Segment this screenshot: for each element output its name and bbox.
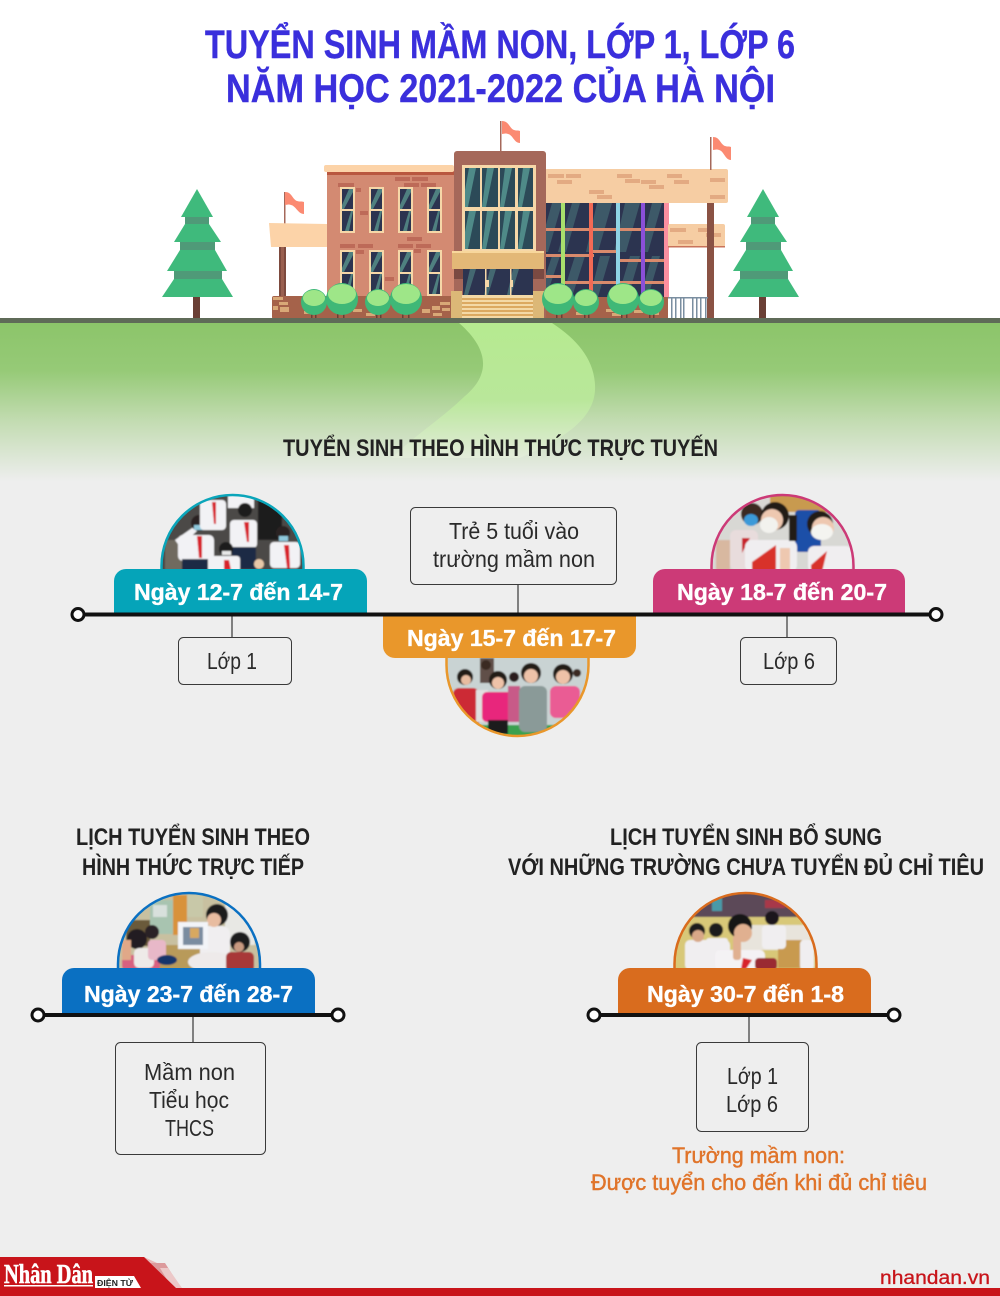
right wing [544,137,731,319]
box: school levels [116,1042,266,1154]
panel: supplementary timeline [588,891,927,1195]
timeline axis [588,1009,900,1021]
windows: upper row [340,187,442,233]
heading: online enrolment: TUYỂN SINH THEO HÌNH THỨC TRỰC TUYẾN [283,434,718,462]
ground line [0,318,1000,323]
note: preschools: Trường mầm non: [672,1143,845,1168]
panel: online timeline [72,494,942,739]
grass field with road [0,322,1000,482]
footer: red bar and logo [0,1257,1000,1296]
box: Lớp 1: Lớp 1 [207,648,257,674]
left wing slab, post and flag [269,192,327,297]
heading: supplementary enrolment: LỊCH TUYỂN SINH BỔ SUNG [610,823,882,851]
photo: young children [448,658,588,735]
box: school levels: Tiểu học [149,1087,229,1113]
timeline axis [32,1009,344,1021]
heading: supplementary enrolment [508,823,984,881]
box: preschool: trường mầm non [433,546,595,572]
title: NĂM HỌC 2021-2022 CỦA HÀ NỘI [226,66,775,111]
photo ring [674,893,816,969]
box: Lớp 6: Lớp 6 [763,648,815,674]
heading: in-person enrolment [76,823,310,881]
date label: 18-7 to 20-7: Ngày 18-7 đến 20-7 [677,579,887,605]
box: school levels: THCS [165,1115,214,1141]
box: grades: Lớp 1 [727,1063,778,1089]
windows: lower row [340,250,442,296]
panel: in-person timeline [32,891,344,1154]
photo ring [446,657,588,736]
date label: 30-7 to 1-8: Ngày 30-7 đến 1-8 [647,981,844,1007]
connector lines [232,584,787,638]
timeline axis [72,608,942,620]
central tower [451,121,546,319]
title [205,22,795,111]
footer: red bar and logo: ĐIỆN TỬ [97,1279,133,1288]
box: school levels: Mầm non [144,1059,235,1085]
photo: classroom [676,894,816,968]
date label: 12-7 to 14-7: Ngày 12-7 đến 14-7 [134,579,343,605]
sky [0,0,1000,320]
box: grades [696,1042,808,1132]
photo ring [712,495,854,570]
box: Lớp 6 [740,638,836,684]
date label: 23-7 to 28-7 [62,968,315,1013]
title: TUYỂN SINH MẦM NON, LỚP 1, LỚP 6 [205,22,795,67]
date label: 15-7 to 17-7 [383,616,636,658]
illustration: school building [162,121,799,319]
box: preschool: Trẻ 5 tuổi vào [449,518,579,544]
date label: 30-7 to 1-8 [618,968,871,1013]
heading: in-person enrolment: HÌNH THỨC TRỰC TIẾP [82,853,304,881]
left brick building [272,165,454,319]
note: preschools [591,1143,927,1195]
bushes [301,283,664,319]
connector line [192,1017,194,1042]
box: Lớp 1 [178,638,292,684]
box: grades: Lớp 6 [726,1091,778,1117]
photo: teacher with children [119,894,259,968]
date label: 15-7 to 17-7: Ngày 15-7 đến 17-7 [407,625,616,651]
icon: right tree [728,189,799,319]
heading: in-person enrolment: LỊCH TUYỂN SINH THEO [76,823,310,851]
date label: 23-7 to 28-7: Ngày 23-7 đến 28-7 [84,981,293,1007]
photo ring [118,893,260,969]
box: preschool [410,508,616,584]
photo: students saluting [162,496,302,569]
connector line [748,1017,750,1042]
photo: students with masks [712,496,852,569]
date label: 12-7 to 14-7 [114,569,367,613]
icon: left tree [162,189,233,319]
note: preschools: Được tuyển cho đến khi đủ chỉ tiêu [591,1170,927,1195]
photo ring [162,495,304,570]
logo text: Nhân Dân [4,1259,93,1289]
date label: 18-7 to 20-7 [653,569,905,613]
footer: website: nhandan.vn [880,1268,990,1289]
